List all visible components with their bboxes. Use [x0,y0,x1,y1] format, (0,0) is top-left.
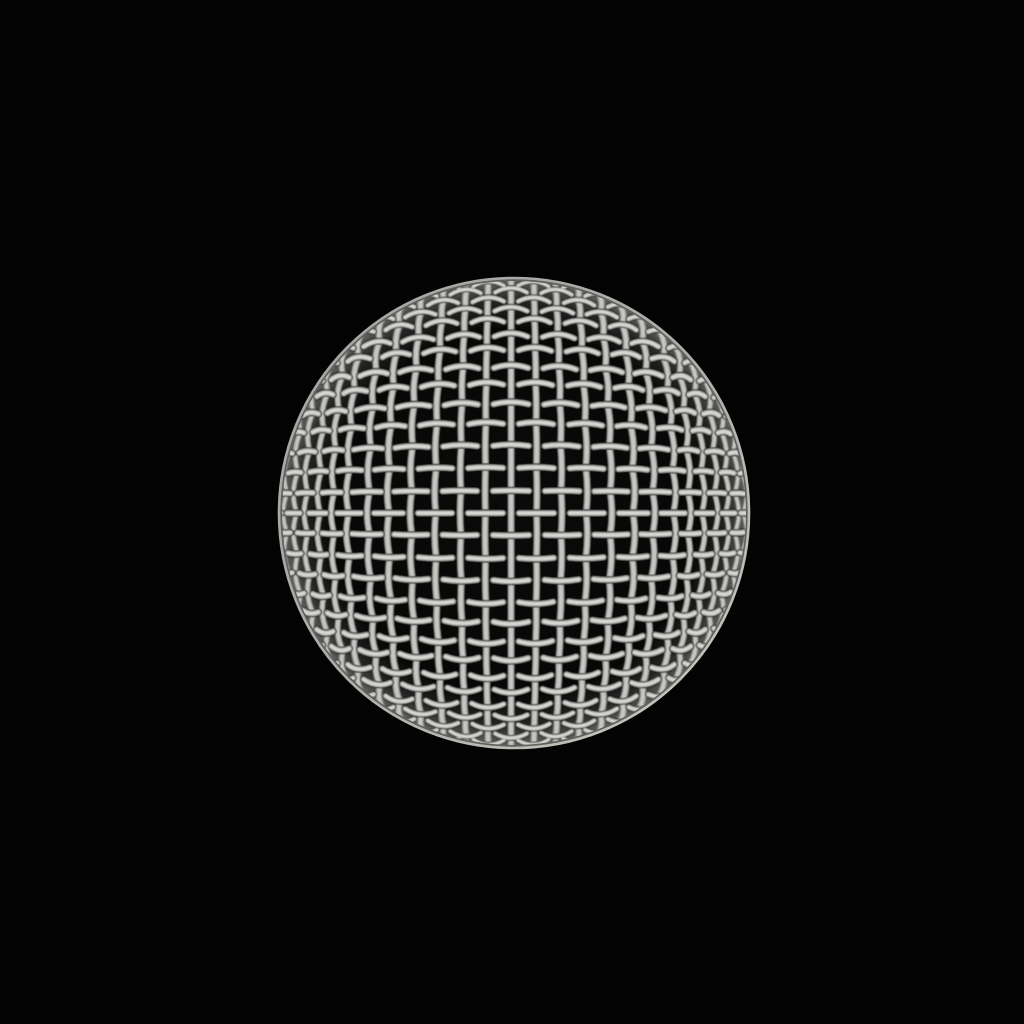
grille interior disc [279,278,749,748]
horizontal wires [273,281,749,745]
microphone grille [273,273,749,753]
vertical wires [275,273,747,753]
outer metal ring [279,278,749,748]
woven wire mesh [273,273,749,753]
